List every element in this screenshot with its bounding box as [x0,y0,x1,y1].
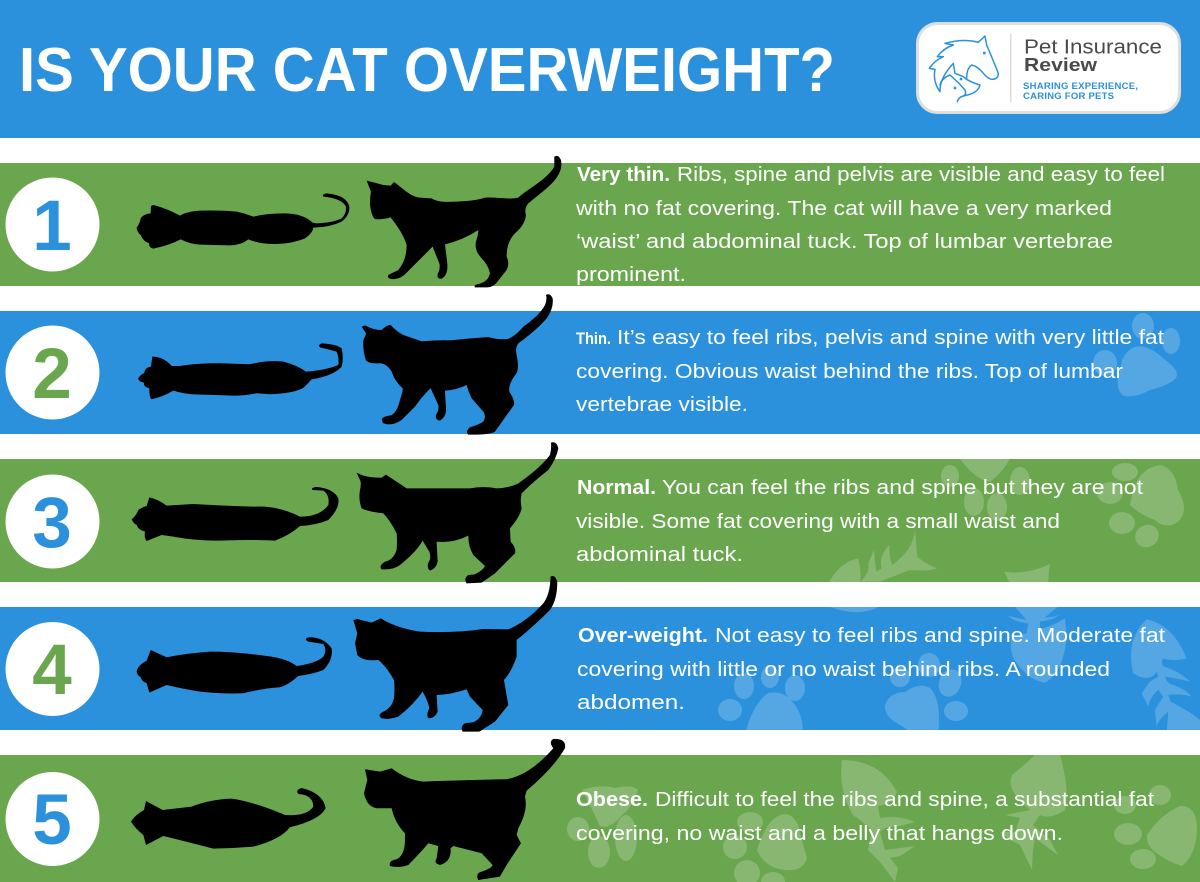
number badge 3: 3 [32,484,72,563]
logo tagline line 1: SHARING EXPERIENCE, [1023,81,1138,92]
cat top view 1 [137,193,349,249]
description 3: visible. Some fat covering with a small waist and [576,511,1060,533]
number badge 5: 5 [32,781,72,860]
description 3: abdominal tuck. [576,544,743,566]
description 4: abdomen. [577,692,685,714]
description 2: Thin. [576,329,611,348]
number badge 1: 1 [32,187,72,266]
cat top view 4 [137,637,332,693]
header banner [0,0,1200,138]
panel: level 1 very thin [0,156,1200,287]
number badge 3 [6,474,100,568]
description 2 [576,327,1164,416]
number badge 5 [6,772,100,866]
cat side view 5 [364,739,565,880]
description 4: Not easy to feel ribs and spine. Moderate fat [715,625,1165,647]
title: IS YOUR CAT OVERWEIGHT? [19,36,835,105]
cat side view 1 [367,156,561,287]
cat side view 3 [357,442,558,583]
description 1: prominent. [576,264,686,286]
cat top view 2 [138,343,343,399]
panel: level 2 thin [0,294,1200,435]
description 1: Very thin. [577,164,670,186]
description 1: with no fat covering. The cat will have a very marked [575,198,1112,220]
logo divider [1010,34,1012,102]
background paws and fish 5 [567,755,1197,882]
description 4: covering with little or no waist behind ribs. A rounded [577,659,1110,681]
number badge 4 [6,622,100,716]
logo name bold: Review [1024,55,1098,75]
description 5 [576,789,1154,845]
number badge 2 [6,326,100,420]
description 3 [576,477,1143,566]
background paws and fish 4 [718,605,1200,735]
description 2: It’s easy to feel ribs, pelvis and spine with very little fat [617,327,1164,349]
description 4: Over-weight. [578,625,708,647]
panel: level 4 over-weight [0,576,1200,735]
cat side view 2 [362,294,553,435]
number badge 2: 2 [32,335,72,414]
description 5: covering, no waist and a belly that hangs down. [576,823,1063,845]
description 1: Ribs, spine and pelvis are visible and easy to feel [677,164,1165,186]
description 2: vertebrae visible. [576,394,748,416]
panel: level 3 normal [0,442,1200,583]
number badge 4: 4 [32,631,72,710]
description 5: Obese. [576,789,648,811]
description 4 [577,625,1165,714]
cat top view 5 [131,788,326,849]
logo: Pet Insurance Review [918,24,1180,112]
icon: horse, cat and dog line art [929,36,998,102]
description 1 [575,164,1165,286]
description 3: You can feel the ribs and spine but they are not [662,477,1143,499]
description 1: ‘waist’ and abdominal tuck. Top of lumbar vertebrae [576,231,1113,253]
panel: level 5 obese [0,739,1200,882]
description 5: Difficult to feel the ribs and spine, a substantial fat [655,789,1154,811]
cat top view 3 [132,487,339,541]
cat side view 4 [353,576,557,732]
background paws and fish 3 [828,455,1184,583]
logo tagline line 2: CARING FOR PETS [1023,91,1114,102]
description 2: covering. Obvious waist behind the ribs. Top of lumbar [576,361,1123,383]
description 3: Normal. [577,477,656,499]
logo name: Pet Insurance [1024,36,1162,58]
background paw 2 [1093,313,1180,396]
number badge 1 [6,178,100,272]
